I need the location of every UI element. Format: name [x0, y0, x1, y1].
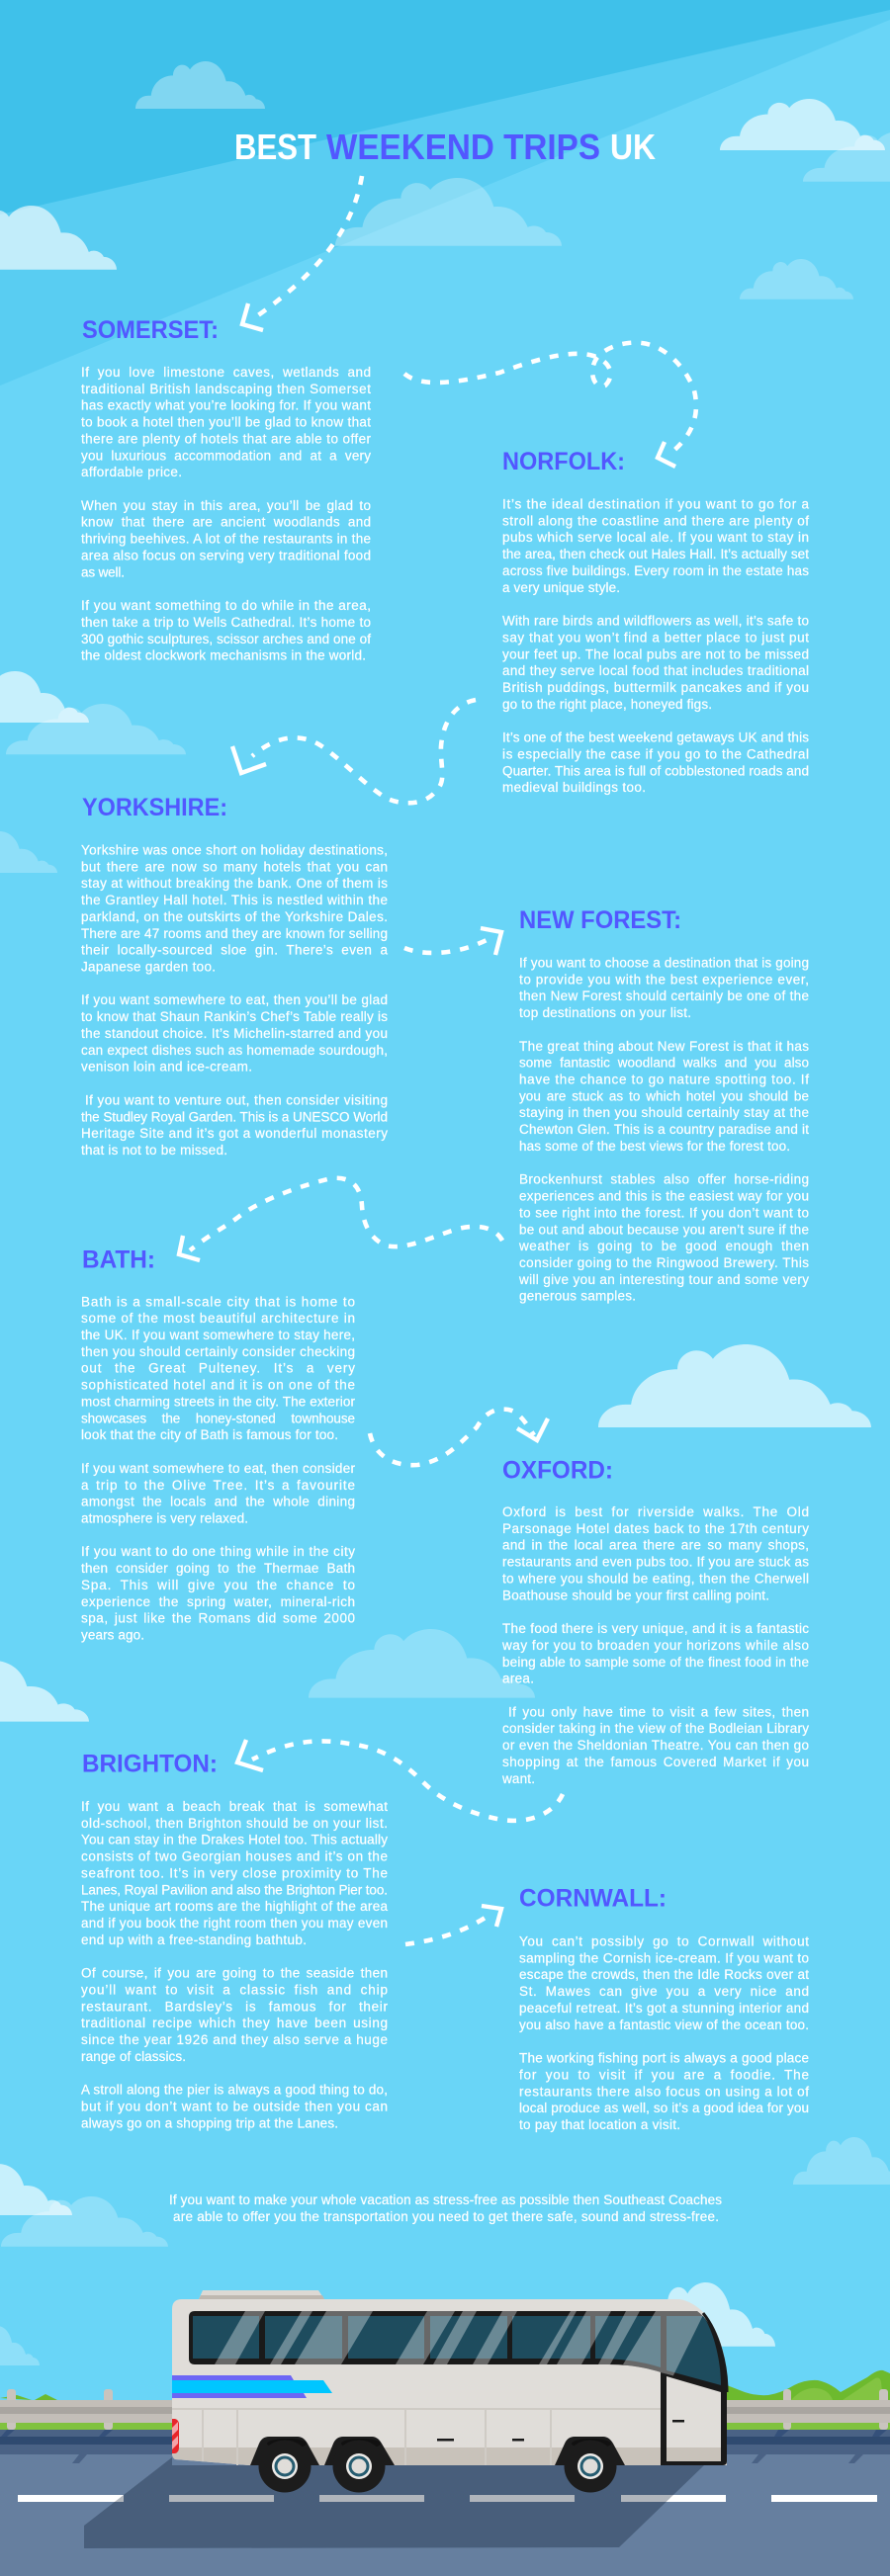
text block: Yorkshire: Yorkshire was once short on holiday destinations,: [81, 842, 388, 858]
text block: New Forest: If you want to choose a destination that is going: [519, 955, 809, 971]
text block: Yorkshire: Japanese garden too.: [81, 960, 216, 975]
text block: Bath: the UK. If you want somewhere to stay here,: [81, 1328, 355, 1342]
text block: Oxford: If you only have time to visit a few sites, then: [508, 1704, 809, 1719]
text block: Yorkshire: can expect dishes such as homemade sourdough,: [81, 1043, 388, 1058]
text block: Norfolk: and they serve local food that includes traditional: [502, 663, 809, 678]
text block: Somerset: there are plenty of hotels that are able to offer: [81, 431, 372, 446]
text block: New Forest: weather is going to be good enough then: [518, 1239, 809, 1253]
text block: Norfolk: medieval buildings too.: [502, 780, 646, 795]
text block: Oxford: to where you should be eating, then the Cherwell: [502, 1571, 809, 1586]
text block: New Forest: have the chance to go nature spotting too. If: [519, 1072, 809, 1087]
text block: New Forest: to see right into the forest. If you don’t want to: [519, 1205, 809, 1220]
text block: Yorkshire: There are 47 rooms and they are known for selling: [81, 926, 388, 941]
text block: Bath: spa, just like the Romans did some 2000: [81, 1611, 355, 1626]
text block: Brighton: Of course, if you are going to the seaside then: [81, 1966, 388, 1981]
heading: Somerset: SOMERSET:: [82, 316, 219, 344]
text block: New Forest: Brockenhurst stables also offer horse-riding: [519, 1172, 809, 1187]
text block: Brighton: you’ll want to visit a classic fish and chip: [81, 1983, 388, 1997]
text block: Somerset: [81, 365, 372, 663]
arrow: New Forest to Bath: [179, 1178, 502, 1260]
road: [0, 2430, 890, 2576]
tail light: [172, 2419, 179, 2453]
text block: Somerset: When you stay in this area, you’ll be glad to: [81, 498, 371, 513]
arrow: Norfolk to Yorkshire: [232, 700, 476, 803]
text block: Norfolk: It’s one of the best weekend getaways UK and this: [502, 730, 809, 745]
wheel: rear 1: [250, 2437, 319, 2493]
text block: Somerset: as well.: [81, 564, 125, 579]
text block: New Forest: generous samples.: [519, 1289, 636, 1304]
text block: Brighton: A stroll along the pier is always a good thing to do,: [81, 2083, 388, 2098]
wheel: front: [555, 2437, 625, 2493]
text block: Brighton: [81, 1799, 388, 2130]
text block: Cornwall: You can’t possibly go to Cornwall without: [519, 1933, 809, 1949]
title: BEST: [234, 127, 316, 167]
text block: Oxford: or even the Sheldonian Theatre. You can then go: [502, 1738, 809, 1753]
text block: Somerset: to book a hotel then you’ll be glad to know that: [81, 415, 371, 430]
text block: Yorkshire: the Grantley Hall hotel. This is nestled within the: [81, 893, 388, 907]
arrow: Bath to Oxford: [370, 1410, 548, 1465]
heading: Brighton: BRIGHTON:: [82, 1751, 218, 1778]
text block: Brighton: If you want a beach break that is somewhat: [81, 1799, 388, 1814]
text block: Somerset: area also focus on serving very traditional food: [81, 548, 371, 563]
text block: Oxford: area.: [502, 1672, 534, 1686]
side stripes: [172, 2375, 332, 2398]
windows: [189, 2311, 727, 2392]
arrow: Yorkshire to New Forest: [404, 928, 501, 955]
text block: Brighton: range of classics.: [81, 2049, 186, 2064]
panel: Oxford: [501, 1456, 809, 1786]
scenery: hills, guardrail and road: [0, 2370, 890, 2576]
text block: Somerset: know that there are ancient woodlands and: [81, 515, 371, 530]
text block: Yorkshire: to know that Shaun Rankin’s Chef’s Table really is: [81, 1009, 388, 1024]
green verge: [0, 2423, 890, 2430]
text block: Cornwall: sampling the Cornish ice-cream. If you want to: [519, 1950, 809, 1965]
text block: Somerset: traditional British landscaping then Somerset: [81, 382, 371, 396]
text block: Brighton: old-school, then Brighton should be on your list.: [81, 1816, 388, 1831]
text block: New Forest: you are stuck as to which hotel you should be: [519, 1088, 809, 1103]
heading: Yorkshire: YORKSHIRE:: [82, 794, 227, 821]
text block: New Forest: top destinations on your list.: [519, 1005, 691, 1020]
text block: New Forest: [518, 955, 809, 1304]
text block: Cornwall: [519, 1933, 809, 2132]
panel: Cornwall: [519, 1885, 809, 2132]
text block: Bath: atmosphere is very relaxed.: [81, 1510, 248, 1526]
footer text: are able to offer you the transportation you need to get there safe, sound and stress-free.: [173, 2209, 719, 2224]
heading: Cornwall: CORNWALL:: [519, 1885, 667, 1913]
panel: Somerset: [81, 316, 372, 663]
heading: New Forest: NEW FOREST:: [519, 906, 681, 934]
arrow: title to Somerset: [242, 176, 362, 330]
heading: Bath: BATH:: [82, 1245, 155, 1273]
text block: Brighton: traditional recipe which they have been using: [81, 2016, 388, 2030]
text block: New Forest: will give you an interesting tour and some very: [518, 1272, 809, 1287]
text block: Oxford: restaurants and even pubs too. If you are stuck as: [502, 1555, 809, 1570]
text block: New Forest: consider going to the Ringwood Brewery. This: [519, 1255, 809, 1270]
text block: Bath: a trip to the Olive Tree. It’s a favourite: [81, 1478, 355, 1493]
text block: Norfolk: pubs which serve local ale. If you want to stay in: [502, 530, 809, 545]
arrow: Brighton to Cornwall: [405, 1906, 501, 1944]
text block: Yorkshire: that is not to be missed.: [81, 1143, 227, 1158]
heading: Oxford: OXFORD:: [502, 1456, 613, 1484]
text block: Yorkshire: venison loin and ice-cream.: [81, 1060, 252, 1074]
text block: Bath: Spa. This will give you the chance to: [81, 1578, 355, 1592]
text block: Brighton: seafront too. It’s in very close proximity to The: [81, 1865, 388, 1880]
text block: Norfolk: [502, 496, 809, 795]
bus shadow: [84, 2457, 704, 2548]
text block: Bath: sophisticated hotel and it is on one of the: [81, 1378, 355, 1393]
text block: Oxford: want.: [501, 1771, 535, 1786]
text block: Cornwall: to pay that location a visit.: [519, 2117, 680, 2132]
text block: Yorkshire: the Studley Royal Garden. This is a UNESCO World: [81, 1109, 388, 1124]
text block: Norfolk: stroll along the coastline and there are plenty of: [502, 513, 809, 528]
text block: Somerset: thriving beehives. A lot of the restaurants in the: [81, 532, 371, 547]
text block: New Forest: Chewton Glen. This is a country paradise and it: [519, 1122, 809, 1137]
panel: Bath: [81, 1245, 356, 1643]
text block: Oxford: The food there is very unique, and it is a fantastic: [502, 1621, 809, 1636]
arrow: Somerset to Norfolk: [404, 343, 696, 467]
text block: Somerset: then take a trip to Wells Cathedral. It’s home to: [81, 615, 371, 630]
text block: Somerset: 300 gothic sculptures, scissor arches and one of: [81, 632, 371, 646]
text block: Cornwall: restaurants there also focus on using a lot of: [519, 2084, 809, 2099]
text block: Cornwall: local produce as well, so it’s a good idea for you: [519, 2101, 809, 2115]
text block: New Forest: then New Forest should certainly be one of the: [519, 988, 809, 1003]
text block: Norfolk: your feet up. The local pubs are not to be missed: [502, 646, 809, 661]
text block: Oxford: shopping at the famous Covered Market if you: [502, 1755, 809, 1769]
text block: Cornwall: escape the crowds, then the Idle Rocks over at: [519, 1967, 809, 1982]
text block: New Forest: experiences and this is the easiest way for you: [519, 1188, 809, 1204]
text block: Norfolk: say that you won’t find a better place to just put: [502, 630, 809, 644]
text block: Bath: showcases the honey-stoned townhouse: [81, 1411, 355, 1425]
text block: Bath: out the Great Pulteney. It’s a very: [81, 1361, 355, 1376]
text block: Bath: then you should certainly consider checking: [81, 1344, 355, 1359]
text block: Bath: most charming streets in the city. The exterior: [81, 1394, 356, 1410]
road dashes: [18, 2495, 877, 2502]
text block: Cornwall: you also have a fantastic view of the ocean too.: [519, 2018, 809, 2032]
text block: Cornwall: St. Mawes can give you a very nice and: [519, 1984, 809, 1999]
text block: Somerset: If you want something to do while in the area,: [81, 598, 371, 613]
text block: Norfolk: across five buildings. Every room in the estate has: [502, 563, 809, 578]
text block: Brighton: You can stay in the Drakes Hotel too. This actually: [81, 1833, 388, 1847]
title: UK: [610, 127, 656, 167]
text block: Norfolk: With rare birds and wildflowers as well, it’s safe to: [502, 613, 809, 629]
text block: Brighton: end up with a free-standing bathtub.: [81, 1932, 307, 1947]
text block: Oxford: and in the local area there are so many shops,: [502, 1538, 809, 1553]
text block: Oxford: Oxford is best for riverside walks. The Old: [502, 1504, 809, 1519]
text block: Yorkshire: the standout choice. It’s Michelin-starred and you: [81, 1026, 388, 1041]
heading: Norfolk: NORFOLK:: [502, 448, 625, 475]
front door: [661, 2372, 727, 2465]
icon: coach bus: [172, 2290, 727, 2493]
text block: Yorkshire: If you want somewhere to eat, then you’ll be glad: [81, 992, 388, 1007]
panel: Norfolk: [502, 448, 809, 795]
text block: New Forest: be out and about because you aren’t sure if the: [519, 1222, 809, 1237]
text block: Somerset: you luxurious accommodation and at a very: [81, 448, 371, 463]
panel: Yorkshire: [81, 794, 388, 1158]
luggage handles: [437, 2439, 524, 2442]
panel: New Forest: [518, 906, 809, 1304]
text block: Norfolk: the area, then check out Hales Hall. It’s actually set: [502, 547, 809, 561]
text block: Oxford: Boathouse should be your first calling point.: [502, 1588, 769, 1602]
text block: Cornwall: peaceful retreat. It’s got a stunning interior and: [519, 2001, 809, 2016]
text block: Brighton: The unique art rooms are the highlight of the area: [81, 1899, 388, 1914]
text block: Bath: look that the city of Bath is famous for too.: [81, 1427, 338, 1442]
lower body band: [172, 2447, 661, 2465]
text block: Brighton: consists of two Georgian houses and it’s on the: [81, 1849, 388, 1864]
text block: Oxford: way for you to broaden your horizons while also: [501, 1638, 809, 1653]
text block: Yorkshire: stay at without breaking the bank. One of them is: [81, 876, 388, 891]
roof unit: [199, 2290, 324, 2299]
title: WEEKEND TRIPS: [326, 127, 600, 167]
text block: New Forest: has some of the best views for the forest too.: [519, 1139, 790, 1154]
text block: Bath: If you want to do one thing while in the city: [81, 1544, 355, 1559]
text block: Norfolk: is especially the case if you go to the Cathedral: [502, 746, 809, 761]
footer text: [169, 2192, 722, 2224]
text block: Yorkshire: their locally-sourced sloe gin. There’s even a: [81, 943, 388, 958]
text block: New Forest: to provide you with the best experience ever,: [519, 972, 809, 987]
wheel: rear 2: [324, 2437, 395, 2493]
text block: New Forest: The great thing about New Forest is that it has: [519, 1039, 809, 1054]
text block: New Forest: staying in then you should certainly stay at the: [519, 1105, 809, 1120]
text block: Cornwall: for you to visit if you are a foodie. The: [519, 2067, 809, 2082]
body seams: [172, 2408, 661, 2465]
text block: Norfolk: British puddings, buttermilk pancakes and if you: [502, 680, 809, 695]
text block: Bath: [81, 1294, 356, 1643]
glass reflections: [215, 2311, 705, 2377]
footer text: If you want to make your whole vacation as stress-free as possible then Southeast Coaches: [169, 2192, 722, 2207]
text block: Bath: years ago.: [81, 1627, 144, 1643]
text block: Yorkshire: If you want to venture out, then consider visiting: [85, 1092, 388, 1107]
guardrail posts: [7, 2389, 888, 2430]
panel: Brighton: [81, 1751, 388, 2130]
text block: Oxford: consider taking in the view of the Bodleian Library: [502, 1721, 809, 1736]
text block: Norfolk: go to the right place, honeyed figs.: [502, 697, 712, 712]
text block: Somerset: has exactly what you’re looking for. If you want: [81, 398, 371, 413]
text block: Oxford: Parsonage Hotel dates back to the 17th century: [502, 1521, 809, 1536]
text block: Bath: then consider going to the Thermae Bath: [81, 1561, 355, 1576]
text block: Brighton: and if you book the right room then you may even: [81, 1916, 388, 1931]
text block: Bath: If you want somewhere to eat, then consider: [81, 1461, 356, 1476]
text block: Bath: experience the spring water, mineral-rich: [81, 1594, 355, 1609]
text block: Yorkshire: parkland, on the outskirts of the Yorkshire Dales.: [81, 909, 388, 924]
text block: Oxford: being able to sample some of the finest food in the: [502, 1655, 809, 1670]
text block: Oxford: [501, 1504, 809, 1786]
text block: Norfolk: a very unique style.: [502, 580, 620, 595]
text block: Brighton: always go on a shopping trip at the Lanes.: [81, 2115, 338, 2130]
text block: Yorkshire: [81, 842, 388, 1158]
text block: Brighton: but if you don’t want to be outside then you can: [81, 2100, 388, 2113]
arrow: Oxford to Brighton: [237, 1740, 563, 1821]
text block: Somerset: If you love limestone caves, wetlands and: [81, 365, 371, 380]
text block: Bath: Bath is a small-scale city that is home to: [81, 1294, 355, 1309]
hills: [0, 2370, 890, 2402]
text block: Norfolk: It’s the ideal destination if you want to go for a: [502, 496, 809, 512]
text block: Cornwall: The working fishing port is always a good place: [519, 2050, 809, 2066]
text block: New Forest: some fantastic woodland walks and you also: [519, 1056, 809, 1071]
text block: Yorkshire: but there are now so many hotels that you can: [81, 859, 388, 874]
text block: Brighton: Lanes, Royal Pavilion and also the Brighton Pier too.: [81, 1882, 388, 1897]
text block: Yorkshire: Heritage Site and it’s got a wonderful monastery: [81, 1126, 388, 1141]
text block: Bath: some of the most beautiful architecture in: [81, 1311, 355, 1326]
text block: Norfolk: Quarter. This area is full of cobblestoned roads and: [502, 763, 809, 778]
text block: Somerset: affordable price.: [81, 465, 182, 479]
bus body: [172, 2299, 727, 2465]
text block: Brighton: restaurant. Bardsley’s is famous for their: [81, 1999, 388, 2014]
text block: Brighton: since the year 1926 and they also serve a huge: [81, 2032, 388, 2047]
text block: Bath: amongst the locals and the whole dining: [81, 1495, 355, 1509]
text block: Somerset: the oldest clockwork mechanisms in the world.: [81, 648, 366, 663]
guardrail: [0, 2400, 890, 2423]
front windscreen edge: [703, 2313, 727, 2392]
